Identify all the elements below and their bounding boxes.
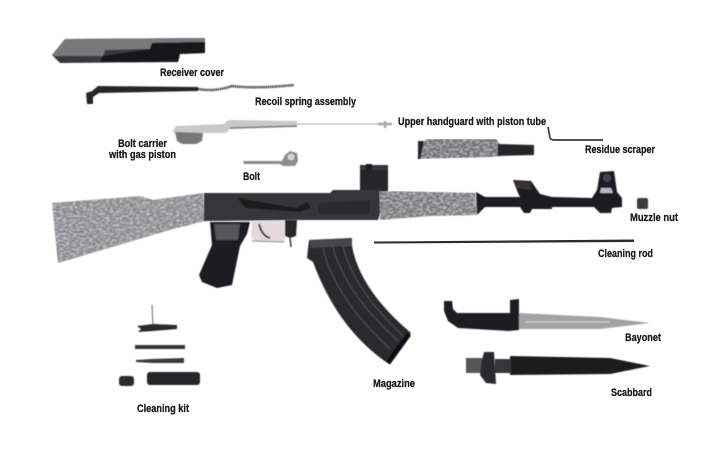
barrel and sights — [476, 171, 622, 215]
bolt — [243, 151, 298, 166]
label: receiver cover: Receiver cover — [160, 67, 225, 79]
cleaning rod — [374, 240, 634, 244]
rifle — [52, 164, 622, 288]
label: cleaning rod: Cleaning rod — [598, 248, 653, 260]
label: cleaning kit: Cleaning kit — [137, 403, 189, 415]
label: muzzle nut: Muzzle nut — [630, 212, 678, 224]
magazine — [307, 238, 411, 364]
recoil spring assembly — [86, 85, 294, 104]
label: bolt: Bolt — [243, 171, 260, 183]
label: upper handguard with piston tube: Upper handguard with piston tube — [398, 116, 546, 128]
bayonet — [444, 299, 650, 331]
bolt carrier with gas piston — [173, 120, 392, 144]
label: residue scraper: Residue scraper — [585, 144, 656, 156]
label: scabbard: Scabbard — [611, 387, 652, 399]
label: bolt carrier with gas piston: with gas piston — [108, 149, 176, 161]
label: bayonet: Bayonet — [625, 332, 661, 344]
residue scraper — [548, 127, 603, 140]
buttstock — [52, 193, 205, 263]
trigger guard — [251, 220, 297, 247]
label: bolt carrier with gas piston — [108, 138, 176, 161]
label: recoil spring assembly: Recoil spring assembly — [255, 96, 357, 108]
scabbard — [466, 352, 650, 384]
receiver cover — [52, 38, 205, 63]
upper handguard with piston tube — [418, 139, 534, 159]
lower handguard — [379, 191, 477, 220]
label: magazine: Magazine — [373, 378, 415, 390]
muzzle nut — [637, 198, 648, 209]
pistol grip — [199, 222, 250, 288]
label: bolt carrier with gas piston: Bolt carrier — [118, 138, 168, 150]
cleaning kit — [119, 305, 200, 386]
receiver — [204, 164, 388, 221]
